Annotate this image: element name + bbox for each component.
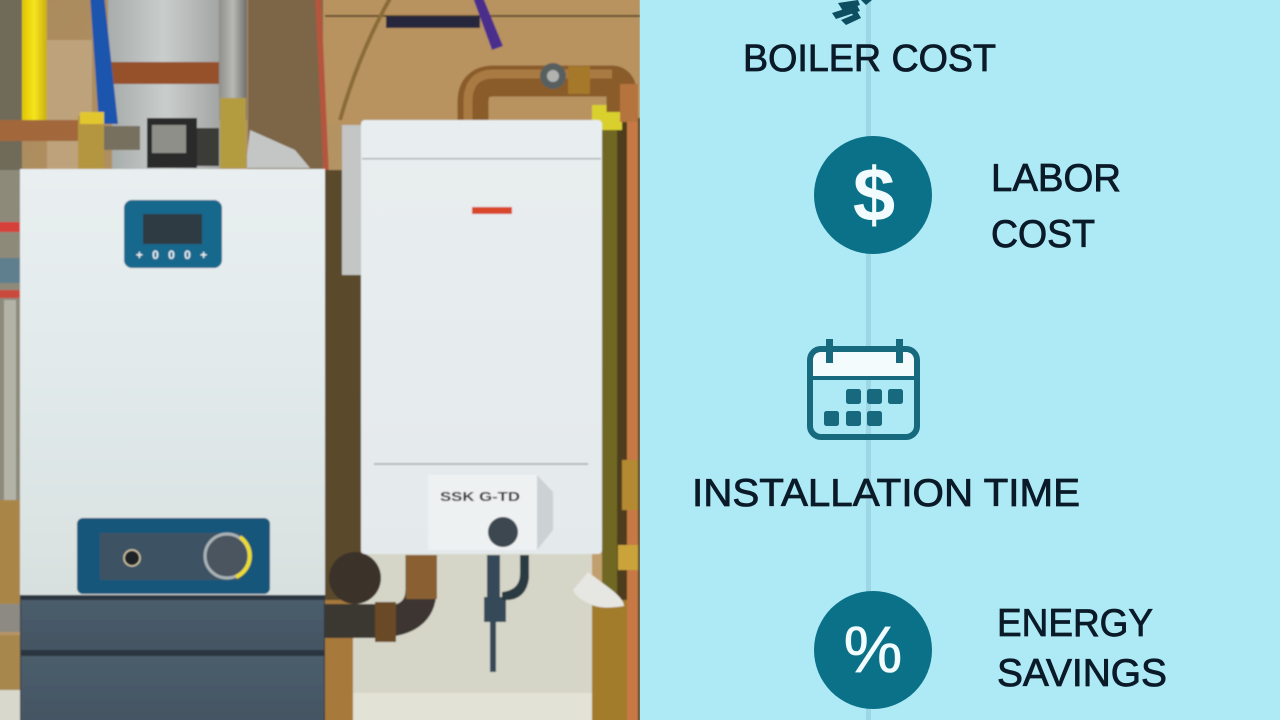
icon: percent (814, 591, 932, 709)
copper pipe horizontal (0, 112, 140, 170)
label plate (428, 475, 553, 550)
tan wire (340, 0, 392, 120)
display control panel: + 0 0 0 + (136, 248, 210, 262)
heading: energy savings: SAVINGS (997, 652, 1167, 695)
heading: installation time: INSTALLATION TIME (692, 472, 1080, 515)
base cabinet (20, 595, 325, 720)
heading: labor cost: LABOR (991, 157, 1121, 200)
wall left section (0, 0, 640, 720)
gas valve under wall boiler (484, 555, 624, 672)
wall-mounted boiler (361, 120, 602, 554)
label plate: SSK G-TD (440, 489, 520, 504)
yellow gas pipe (22, 0, 47, 120)
insulated pipe (219, 0, 247, 168)
red copper tube (315, 0, 357, 600)
brand badge (472, 207, 512, 214)
icon: dollar (814, 136, 932, 254)
copper elbow pipe (468, 63, 638, 122)
lower black pipe (0, 552, 437, 642)
large floor boiler (20, 169, 325, 720)
timeline line (866, 0, 871, 720)
blue pipe (90, 0, 118, 124)
heading: boiler cost: BOILER COST (743, 38, 996, 80)
icon: percent: % (844, 612, 902, 686)
wall behind wall boiler (325, 125, 592, 720)
valve (147, 118, 310, 168)
display control panel (124, 200, 222, 268)
water tank (108, 0, 220, 170)
heading: energy savings: ENERGY (997, 602, 1153, 645)
dial control panel (77, 518, 270, 594)
right wall strip (592, 105, 640, 720)
knob (488, 517, 518, 547)
icon: boiler cost fragment (832, 0, 872, 25)
heading: labor cost (991, 157, 1121, 256)
panel: cost factors (640, 0, 1280, 720)
heading: labor cost: COST (991, 213, 1095, 256)
panel: boiler photograph (0, 0, 640, 720)
icon: dollar: $ (853, 153, 895, 238)
purple fitting and black pipe (386, 0, 503, 50)
heading: energy savings (997, 602, 1167, 695)
icon: calendar (810, 339, 917, 437)
